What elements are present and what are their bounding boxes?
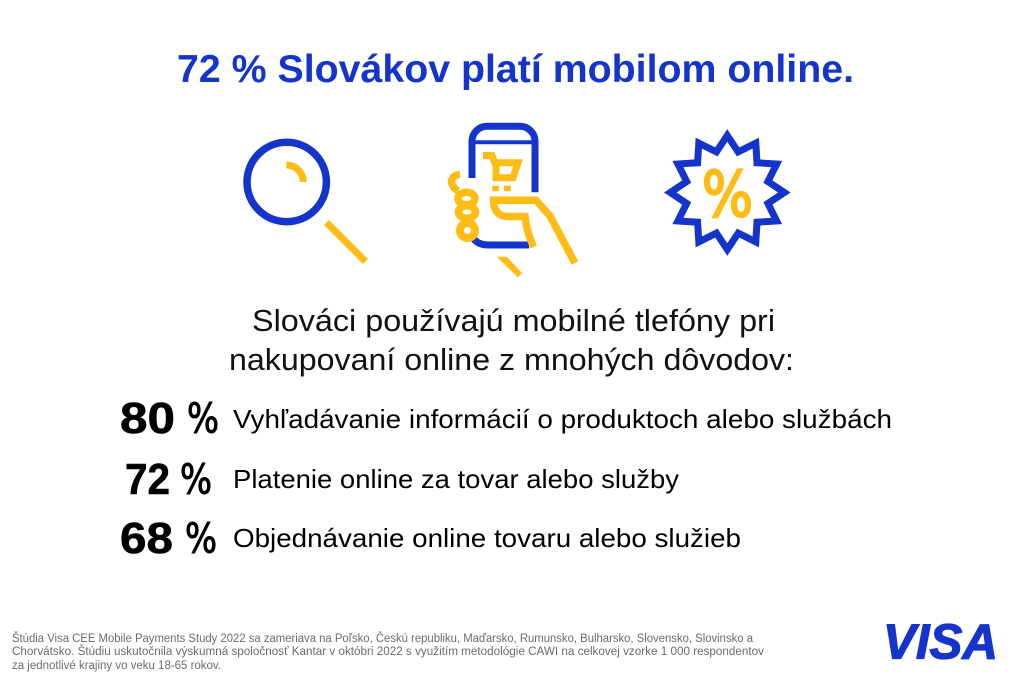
- statistic: 72 %: Platenie online za tovar alebo služby: [233, 464, 679, 494]
- footnote: [12, 632, 764, 672]
- icon: percent starburst: [670, 136, 784, 250]
- intro text: [229, 303, 794, 377]
- statistic: 68 %: %: [185, 514, 217, 562]
- intro text: nakupovaní online z mnohých dôvodov:: [229, 342, 794, 377]
- statistic: 72 %: 72: [125, 455, 170, 504]
- statistic: 68 %: [120, 514, 741, 563]
- icon: magnifying glass: [247, 142, 366, 262]
- statistic: 80 %: 80: [120, 394, 175, 443]
- title: 72 % Slovákov platí mobilom online.: [177, 48, 854, 91]
- statistic: 80 %: %: [187, 394, 219, 442]
- statistic: 72 %: %: [180, 456, 212, 504]
- icon: hand holding phone with shopping cart: [452, 126, 575, 277]
- statistic: 72 %: [125, 455, 679, 504]
- footnote: za jednotlivé krajiny vo veku 18-65 rokov.: [12, 660, 221, 672]
- statistic: 80 %: Vyhľadávanie informácií o produktoch alebo službách: [233, 404, 892, 434]
- footnote: Chorvátsko. Štúdiu uskutočnila výskumná spoločnosť Kantar v októbri 2022 s využitím metodológie CAWI na celkovej vzorke 1 000 respondentov: [12, 645, 764, 658]
- intro text: Slováci používajú mobilné tlefóny pri: [252, 303, 775, 338]
- statistic: 68 %: 68: [120, 514, 173, 563]
- statistic: 68 %: Objednávanie online tovaru alebo služieb: [233, 523, 741, 553]
- footnote: Štúdia Visa CEE Mobile Payments Study 2022 sa zameriava na Poľsko, Českú republiku, Maďarsko, Rumunsko, Bulharsko, Slovensko, Slovinsko a: [12, 632, 754, 645]
- statistic: 80 %: [120, 394, 892, 443]
- icon: percent starburst: %: [702, 158, 753, 231]
- logo: Visa: VISA: [883, 616, 998, 670]
